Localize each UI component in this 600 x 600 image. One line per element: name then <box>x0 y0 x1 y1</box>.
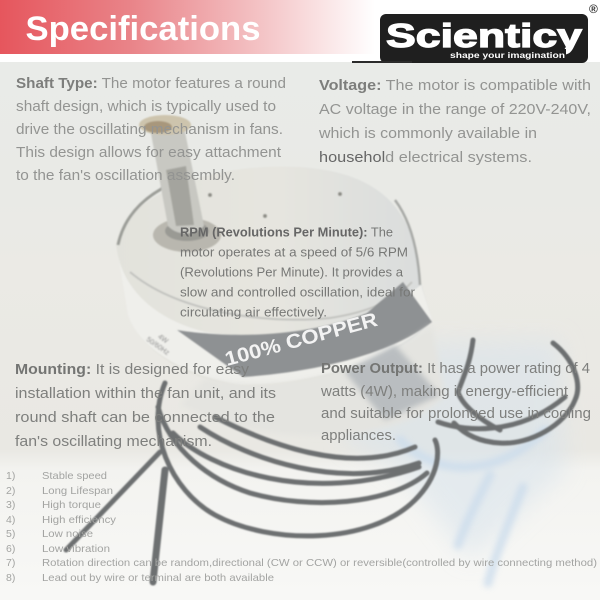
feature list: 8) <box>6 572 15 584</box>
base cylinder <box>180 325 445 436</box>
text block: rpm: slow and controlled oscillation, ideal for <box>180 286 415 300</box>
text block: rpm: RPM (Revolutions Per Minute): The <box>180 226 393 240</box>
feature list: Long Lifespan <box>42 485 113 497</box>
registered mark: ® <box>589 2 598 16</box>
text block: voltage <box>318 77 591 166</box>
feature list: Lead out by wire or terminal are both available <box>42 572 274 584</box>
feature list: 1) <box>6 470 15 482</box>
rating text <box>145 329 176 357</box>
text block: shaft type: to the fan's oscillation assembly. <box>16 168 235 184</box>
text block: voltage: Voltage: The motor is compatible with <box>319 77 591 94</box>
text block: mounting: fan's oscillating mechanism. <box>15 433 212 450</box>
shaft <box>139 115 221 252</box>
motor photo <box>66 115 578 583</box>
feature list: 5) <box>6 528 15 540</box>
text block: rpm: (Revolutions Per Minute). It provides a <box>180 266 403 280</box>
header band <box>0 0 375 54</box>
rating text: 4W <box>156 333 169 345</box>
text block: mounting <box>15 361 276 450</box>
blue cables <box>400 430 545 583</box>
text block: power output <box>320 361 591 444</box>
feature list: Low vibration <box>42 543 110 555</box>
feature list <box>6 470 597 584</box>
motor body <box>116 167 432 388</box>
text block: power output: appliances. <box>321 428 396 444</box>
logo wordmark: Scienticy <box>386 16 583 54</box>
copper label band <box>177 282 432 377</box>
feature list: 7) <box>6 557 15 569</box>
text block: rpm <box>180 226 415 320</box>
text block: shaft type <box>16 76 286 184</box>
rating text: 50/60Hz <box>145 336 170 357</box>
text block: shaft type: drive the oscillating mechanism in fans. <box>16 122 283 138</box>
feature list: 2) <box>6 485 15 497</box>
feature list: 4) <box>6 514 15 526</box>
logo tagline <box>449 49 566 60</box>
text block: rpm: motor operates at a speed of 5/6 RPM <box>180 246 408 260</box>
logo <box>352 2 598 63</box>
blue cable reflection <box>345 340 565 560</box>
text block: power output: Power Output: It has a power rating of 4 <box>321 361 590 377</box>
text block: voltage: which is commonly available in <box>318 125 537 142</box>
title: Specifications <box>26 10 260 48</box>
logo tagline text: shape your imagination <box>450 51 565 60</box>
text block: rpm: circulating air effectively. <box>180 306 327 320</box>
text block: mounting: installation within the fan unit, and its <box>15 385 276 402</box>
text block: voltage: AC voltage in the range of 220V-240V, <box>319 101 591 118</box>
text block: power output: watts (4W), making it energy-efficient <box>320 384 568 400</box>
text block: shaft type: shaft design, which is typically used to <box>16 99 276 115</box>
feature list: High efficiency <box>42 514 117 526</box>
text block: mounting: Mounting: It is designed for easy <box>15 361 250 378</box>
feature list: Rotation direction can be random,directional (CW or CCW) or reversible(controlled by wire connecting method) <box>42 557 597 569</box>
text block: power output: and suitable for prolonged use in cooling <box>321 406 591 422</box>
text block: mounting: round shaft can be connected to the <box>15 409 275 426</box>
feature list: High torque <box>42 499 101 511</box>
feature list: Low noise <box>42 528 93 540</box>
black wires <box>66 340 578 582</box>
label text: 100% COPPER <box>223 309 381 371</box>
feature list: Stable speed <box>42 470 107 482</box>
text block: voltage: househol d electrical systems. <box>319 149 532 166</box>
dark reflection <box>345 345 440 420</box>
text block: shaft type: Shaft Type: The motor features a round <box>16 76 286 92</box>
text block: shaft type: This design allows for easy attachment <box>16 145 281 161</box>
feature list: 3) <box>6 499 15 511</box>
feature list: 6) <box>6 543 15 555</box>
